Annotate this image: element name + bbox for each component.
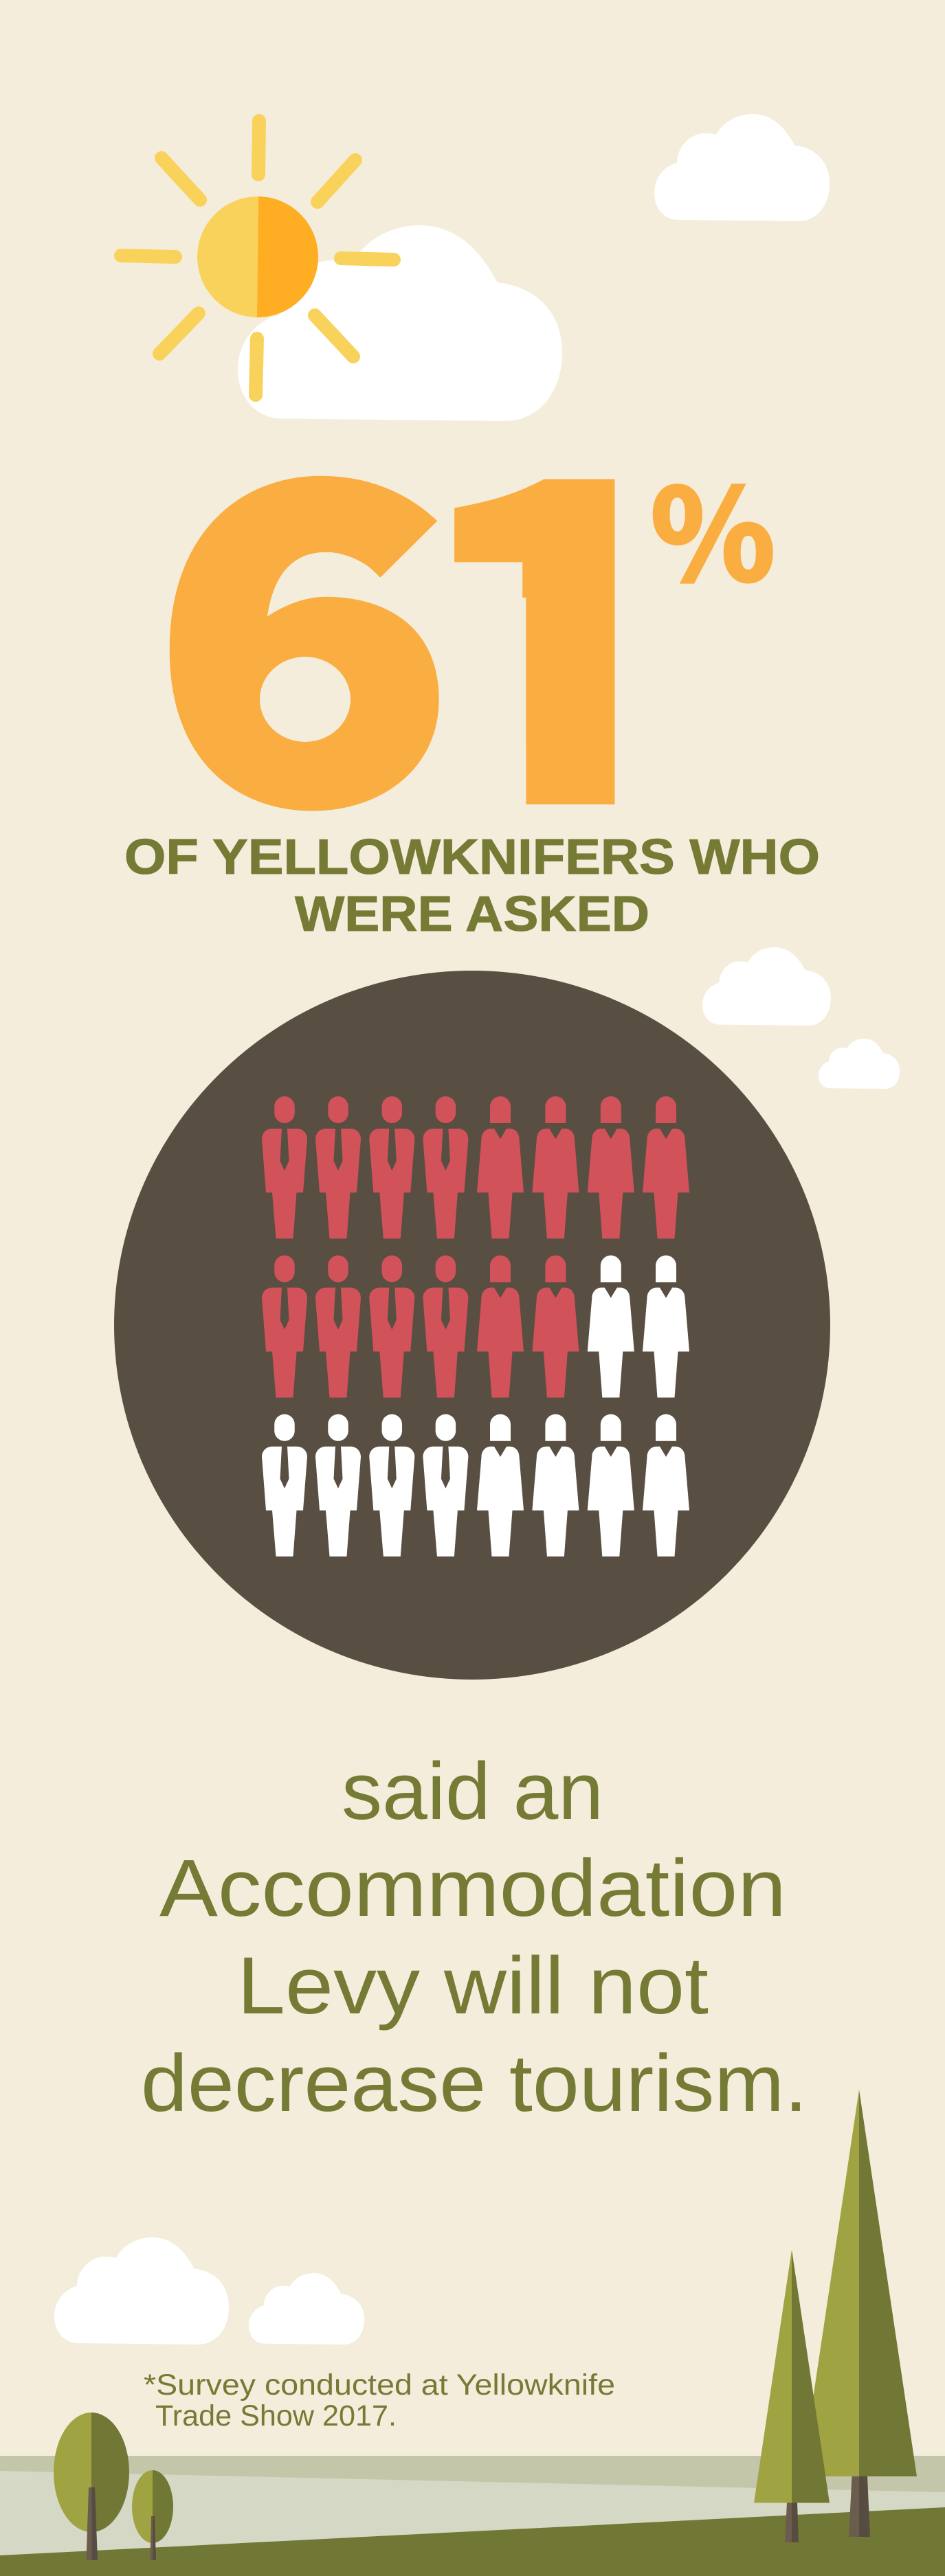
icon: sun [121, 121, 394, 395]
digit 6: 6 [156, 306, 449, 920]
big number 61% [169, 475, 773, 811]
sun rays [121, 121, 394, 395]
sun disc dark half [257, 196, 318, 317]
line 4: decrease tourism. [141, 2038, 808, 2129]
pictogram row 1 [262, 1096, 689, 1239]
heading [124, 830, 820, 942]
footnote line 1: *Survey conducted at Yellowknife [144, 2369, 615, 2402]
sun disc light half [197, 196, 258, 317]
footnote [144, 2369, 615, 2432]
landscape: distant band [0, 2456, 945, 2576]
statement text [141, 1746, 808, 2129]
heading line 1: OF YELLOWKNIFERS WHO [124, 830, 820, 885]
line 3: Levy will not [237, 1941, 709, 2031]
circle [114, 971, 830, 1680]
tree: tall pine [801, 2090, 917, 2537]
cloud behind sun [238, 225, 562, 421]
cloud: middle large [702, 947, 831, 1026]
cloud: top right [654, 114, 830, 221]
landscape: foreground ground [0, 2507, 945, 2576]
footnote line 2: Trade Show 2017. [155, 2399, 397, 2432]
percent sign: % [650, 433, 776, 618]
panel: dark circle with people pictogram [114, 971, 830, 1680]
pictogram row 2 [262, 1256, 689, 1397]
cloud: bottom left small [249, 2273, 364, 2345]
pictogram row 3 [262, 1414, 689, 1557]
cloud: bottom left large [54, 2237, 229, 2345]
cloud: middle small [819, 1039, 900, 1089]
landscape: light hill [0, 2471, 945, 2576]
counter of digit 6 [260, 657, 351, 742]
heading line 2: WERE ASKED [295, 887, 649, 942]
line 2: Accommodation [159, 1843, 786, 1934]
tree: small pine [754, 2250, 830, 2542]
tree: small round [132, 2470, 173, 2560]
tree: large round [54, 2413, 129, 2560]
digit 1: 1 [408, 286, 711, 934]
line 1: said an [342, 1746, 603, 1837]
